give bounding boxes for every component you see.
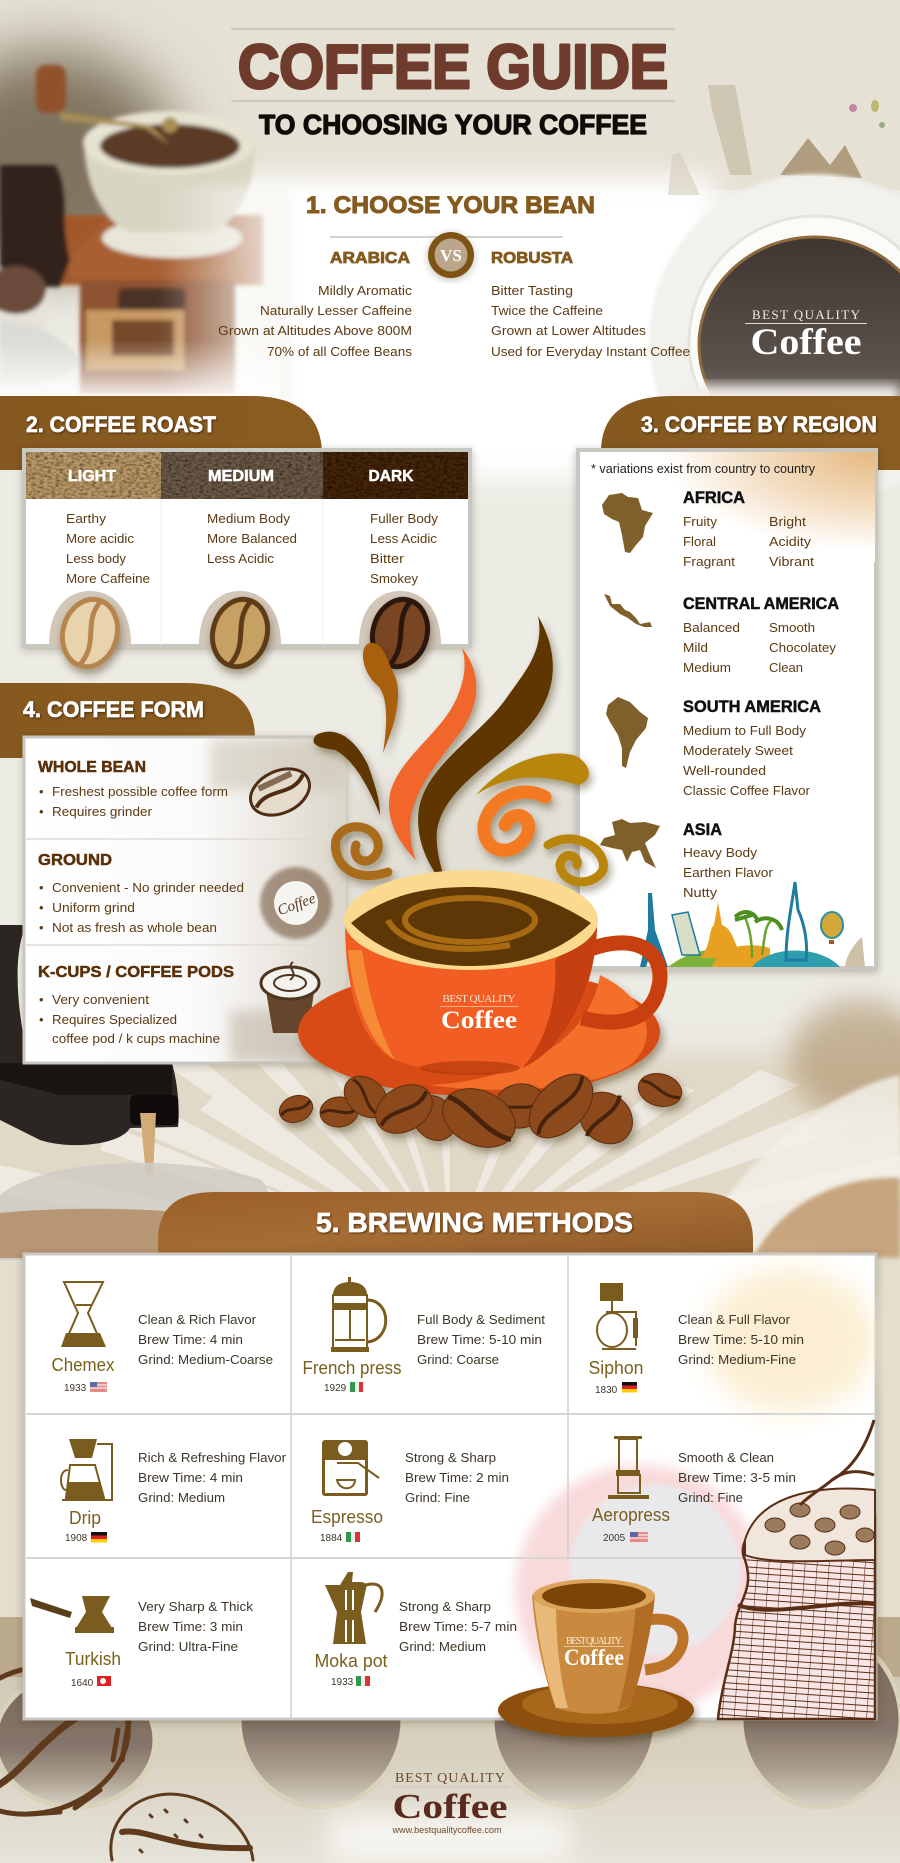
medium roast notes: Medium Body <box>207 511 291 526</box>
region: asia: Earthen Flavor <box>683 865 774 880</box>
panel decoration: cream corner <box>705 1268 875 1412</box>
robusta column: Bitter Tasting <box>491 283 573 298</box>
logo bottom <box>392 1771 510 1836</box>
form: k-cups: • <box>39 992 44 1007</box>
form: whole bean: • <box>39 784 44 799</box>
logo top right <box>745 307 867 363</box>
region: central america: Smooth <box>769 620 815 635</box>
blurred beans on the right <box>790 1000 900 1120</box>
arabica column: Naturally Lesser Caffeine <box>260 303 412 318</box>
icon: drip <box>61 1439 112 1500</box>
region: south america: SOUTH AMERICA <box>683 697 821 716</box>
method: french press: Brew Time: 5-10 min <box>417 1332 542 1347</box>
robusta column: Grown at Lower Altitudes <box>491 323 647 338</box>
light roast notes: More acidic <box>66 531 135 546</box>
region: south america: Well-rounded <box>683 763 766 778</box>
method: french press: Grind: Coarse <box>417 1352 499 1367</box>
form: ground <box>38 852 332 939</box>
panel: coffee by region <box>578 450 876 968</box>
light roast notes: Less body <box>66 551 127 566</box>
method: espresso: Strong & Sharp <box>405 1450 496 1465</box>
method: siphon: Siphon <box>588 1358 644 1378</box>
region: africa: Fruity <box>683 514 718 529</box>
icon: french press <box>331 1277 386 1352</box>
logo bottom: www.bestqualitycoffee.com <box>392 1825 502 1836</box>
method: moka pot: Strong & Sharp <box>399 1599 491 1614</box>
cup rim and coffee <box>344 870 598 970</box>
method: siphon: Grind: Medium-Fine <box>678 1352 796 1367</box>
form: ground: Convenient - No grinder needed <box>52 880 244 895</box>
white fog over grinder <box>160 185 290 405</box>
region: central america: Chocolatey <box>769 640 837 655</box>
section 3 header tab <box>601 396 900 470</box>
bottom wood <box>0 1617 900 1863</box>
method: moka pot: Moka pot <box>314 1651 388 1671</box>
panel: coffee form <box>24 737 346 1063</box>
form: whole bean: Requires grinder <box>52 804 153 819</box>
region: africa: Floral <box>683 534 716 549</box>
roast header: medium: MEDIUM <box>208 468 274 485</box>
map: south america <box>606 697 648 768</box>
vs badge <box>428 232 474 278</box>
icon: turkish pot <box>30 1596 114 1633</box>
icon: sketched bean <box>243 760 317 824</box>
dark roast notes: Less Acidic <box>370 531 437 546</box>
coffee cup <box>298 870 660 1096</box>
note: * variations exist from country to country <box>591 462 816 476</box>
method: chemex: Clean & Rich Flavor <box>138 1312 257 1327</box>
open book shape <box>700 1075 900 1260</box>
form: ground: • <box>39 920 44 935</box>
method: moka pot: 1933 <box>331 1677 354 1688</box>
roast header: light: LIGHT <box>68 468 116 485</box>
method: aeropress: Aeropress <box>592 1505 670 1525</box>
method: siphon: 1830 <box>595 1385 618 1396</box>
region: africa <box>602 488 814 569</box>
method: espresso: 1884 <box>320 1533 343 1544</box>
form: ground: • <box>39 900 44 915</box>
section 2 header tab <box>0 396 322 470</box>
roast header: dark: DARK <box>368 468 414 485</box>
method: aeropress: Smooth & Clean <box>678 1450 774 1465</box>
method: chemex: 1933 <box>64 1383 87 1394</box>
method: french press: 1929 <box>324 1383 347 1394</box>
dark roast notes: Smokey <box>370 571 419 586</box>
region: africa: Fragrant <box>683 554 735 569</box>
light roast notes: Earthy <box>66 511 107 526</box>
method: espresso: Grind: Fine <box>405 1490 470 1505</box>
glass carafe <box>0 1163 278 1260</box>
medium roast notes: More Balanced <box>207 531 297 546</box>
method: aeropress: 2005 <box>603 1533 626 1544</box>
method: french press: Full Body & Sediment <box>417 1312 545 1327</box>
method: moka pot: Grind: Medium <box>399 1639 486 1654</box>
method: aeropress: Grind: Fine <box>678 1490 743 1505</box>
region: central america: Mild <box>683 640 708 655</box>
panel: coffee roast <box>24 450 470 646</box>
logo top right: BEST QUALITY <box>752 307 861 322</box>
mug handle <box>640 1619 683 1670</box>
sketch bean bottom left <box>0 1643 148 1837</box>
method: drip: Drip <box>69 1508 101 1528</box>
method: siphon <box>588 1283 804 1396</box>
mug body <box>532 1595 655 1714</box>
logo top right: Coffee <box>750 322 862 363</box>
roast header: dark <box>323 452 468 499</box>
light coffee mug <box>498 1579 694 1737</box>
arabica column: ARABICA <box>330 250 410 267</box>
landmarks top right <box>668 43 885 195</box>
heading: coffee by region: 3. COFFEE BY REGION <box>641 412 877 437</box>
mug saucer <box>498 1683 694 1737</box>
method: aeropress: Brew Time: 3-5 min <box>678 1470 796 1485</box>
map: asia <box>600 819 660 868</box>
icon: medium bean <box>199 591 281 673</box>
form: k-cups: • <box>39 1012 44 1027</box>
cup logo: Coffee <box>441 1007 517 1034</box>
sketch bean bottom center <box>111 1794 253 1860</box>
form: whole bean: Freshest possible coffee form <box>52 784 228 799</box>
region: central america: Clean <box>769 660 803 675</box>
steam: mustard swirl top <box>476 754 589 795</box>
method: aeropress <box>592 1436 796 1544</box>
steam: mustard spiral <box>548 839 604 882</box>
method: moka pot <box>314 1572 517 1688</box>
cup handle <box>582 943 660 1022</box>
coffee cups row <box>0 1633 900 1807</box>
coffee beans pile <box>276 1062 685 1159</box>
panel decoration: pink ring <box>515 1465 765 1715</box>
robusta column <box>491 250 690 359</box>
method: turkish: 1640 <box>71 1678 94 1689</box>
region: africa: Vibrant <box>769 554 814 569</box>
form: k-cups: Requires Specialized <box>52 1012 177 1027</box>
region: asia: ASIA <box>683 820 722 839</box>
region: africa: Bright <box>769 514 806 529</box>
section 1: choose your bean <box>218 192 690 359</box>
method: chemex: Grind: Medium-Coarse <box>138 1352 273 1367</box>
mug logo: BEST QUALITY <box>566 1636 622 1647</box>
coffee machine <box>0 925 179 1175</box>
robusta column: Twice the Caffeine <box>491 303 603 318</box>
light roast notes: More Caffeine <box>66 571 150 586</box>
roast header: light <box>26 452 161 499</box>
arabica column: Grown at Altitudes Above 800M <box>218 323 412 338</box>
method: turkish: Grind: Ultra-Fine <box>138 1639 238 1654</box>
form: ground: Not as fresh as whole bean <box>52 920 217 935</box>
region: south america: Classic Coffee Flavor <box>683 783 811 798</box>
region: south america: Moderately Sweet <box>683 743 793 758</box>
heading: choose your bean: 1. CHOOSE YOUR BEAN <box>306 192 595 219</box>
form: k-cups: coffee pod / k cups machine <box>52 1031 220 1046</box>
arabica column: 70% of all Coffee Beans <box>267 344 413 359</box>
sketched coffee sack <box>718 1420 875 1719</box>
light roast notes <box>66 511 150 586</box>
landmarks illustration <box>640 882 865 967</box>
title: COFFEE GUIDE <box>238 33 668 102</box>
icon: dark bean <box>359 591 441 673</box>
method: turkish: Very Sharp & Thick <box>138 1599 254 1614</box>
form: ground: GROUND <box>38 852 112 869</box>
icon: coffee pod cup <box>261 962 319 1033</box>
cup logo <box>440 993 518 1034</box>
dark roast notes <box>370 511 439 586</box>
method: siphon: Brew Time: 5-10 min <box>678 1332 804 1347</box>
cup lid at right <box>755 1178 900 1258</box>
region: south america <box>606 697 821 798</box>
region: africa: AFRICA <box>683 488 745 507</box>
form: k-cups <box>38 962 319 1046</box>
steam: orange spiral <box>484 792 545 850</box>
panel: brewing methods <box>24 1254 876 1719</box>
icon: ground coffee circle <box>260 867 332 939</box>
form: ground: Uniform grind <box>52 900 135 915</box>
region: asia: Heavy Body <box>683 845 758 860</box>
method: french press: French press <box>302 1358 402 1378</box>
method: chemex: Brew Time: 4 min <box>138 1332 243 1347</box>
icon: espresso <box>322 1440 379 1496</box>
mug logo: Coffee <box>564 1645 624 1670</box>
form: whole bean: WHOLE BEAN <box>38 759 146 776</box>
medium roast notes: Less Acidic <box>207 551 274 566</box>
steam: orange ribbon <box>389 648 476 860</box>
heading: brewing methods: 5. BREWING METHODS <box>316 1207 633 1238</box>
region: asia: Nutty <box>683 885 718 900</box>
method: moka pot: Brew Time: 5-7 min <box>399 1619 517 1634</box>
robusta column: Used for Everyday Instant Coffee <box>491 344 690 359</box>
steam swirls <box>313 616 604 888</box>
map: africa <box>602 493 653 553</box>
region: central america: Medium <box>683 660 731 675</box>
cup body <box>345 920 597 1073</box>
grinder photo <box>0 65 263 395</box>
method: turkish: Brew Time: 3 min <box>138 1619 243 1634</box>
region: central america <box>604 594 839 675</box>
dark roast notes: Fuller Body <box>370 511 439 526</box>
icon: aeropress <box>608 1436 649 1499</box>
map: central america <box>604 594 652 627</box>
saucer <box>298 968 660 1096</box>
method: drip <box>61 1439 287 1544</box>
steam: left spiral <box>335 827 388 876</box>
heading: coffee roast: 2. COFFEE ROAST <box>26 412 217 437</box>
roast header: medium <box>161 452 323 499</box>
mug rim <box>533 1579 655 1613</box>
method: siphon: Clean & Full Flavor <box>678 1312 791 1327</box>
form: k-cups: K-CUPS / COFFEE PODS <box>38 964 234 981</box>
icon: siphon <box>597 1283 638 1349</box>
form: whole bean: • <box>39 804 44 819</box>
plate and coffee <box>649 174 900 506</box>
section 4 header tab <box>0 683 255 758</box>
cup logo: BEST QUALITY <box>442 993 516 1005</box>
logo bottom: Coffee <box>392 1787 508 1826</box>
icon: light bean <box>49 591 131 673</box>
heading: coffee form: 4. COFFEE FORM <box>23 697 204 722</box>
region: central america: CENTRAL AMERICA <box>683 594 839 613</box>
method: chemex <box>52 1282 273 1394</box>
region: central america: Balanced <box>683 620 740 635</box>
steam: caramel drop <box>363 643 398 753</box>
region: asia <box>600 819 774 900</box>
icon: chemex <box>61 1282 106 1347</box>
logo bottom: BEST QUALITY <box>395 1771 505 1786</box>
method: drip: Rich & Refreshing Flavor <box>138 1450 287 1465</box>
subtitle: TO CHOOSING YOUR COFFEE <box>259 109 647 140</box>
method: turkish <box>30 1596 254 1689</box>
method: drip: 1908 <box>65 1533 88 1544</box>
arabica column: Mildly Aromatic <box>318 283 413 298</box>
method: espresso <box>311 1440 509 1544</box>
method: french press <box>302 1277 545 1394</box>
robusta column: ROBUSTA <box>491 250 573 267</box>
method: espresso: Espresso <box>311 1507 383 1527</box>
method: espresso: Brew Time: 2 min <box>405 1470 509 1485</box>
vs badge: VS <box>440 246 462 265</box>
section 5 header tab <box>158 1192 753 1256</box>
dark roast notes: Bitter <box>370 551 405 566</box>
method: chemex: Chemex <box>52 1355 114 1375</box>
form: ground: • <box>39 880 44 895</box>
form: k-cups: Very convenient <box>52 992 149 1007</box>
background rays <box>0 1025 900 1262</box>
steam: dark swirl left <box>313 732 380 815</box>
region: africa: Acidity <box>769 534 812 549</box>
medium roast notes <box>207 511 297 566</box>
method: drip: Brew Time: 4 min <box>138 1470 243 1485</box>
method: drip: Grind: Medium <box>138 1490 225 1505</box>
title rules <box>231 28 675 102</box>
arabica column <box>218 250 413 359</box>
icon: ground coffee circle: Coffee <box>276 891 318 919</box>
method: turkish: Turkish <box>65 1649 121 1669</box>
icon: moka pot <box>325 1572 382 1644</box>
steam: dark ribbon <box>418 616 553 888</box>
form: whole bean <box>38 759 317 824</box>
region: south america: Medium to Full Body <box>683 723 807 738</box>
